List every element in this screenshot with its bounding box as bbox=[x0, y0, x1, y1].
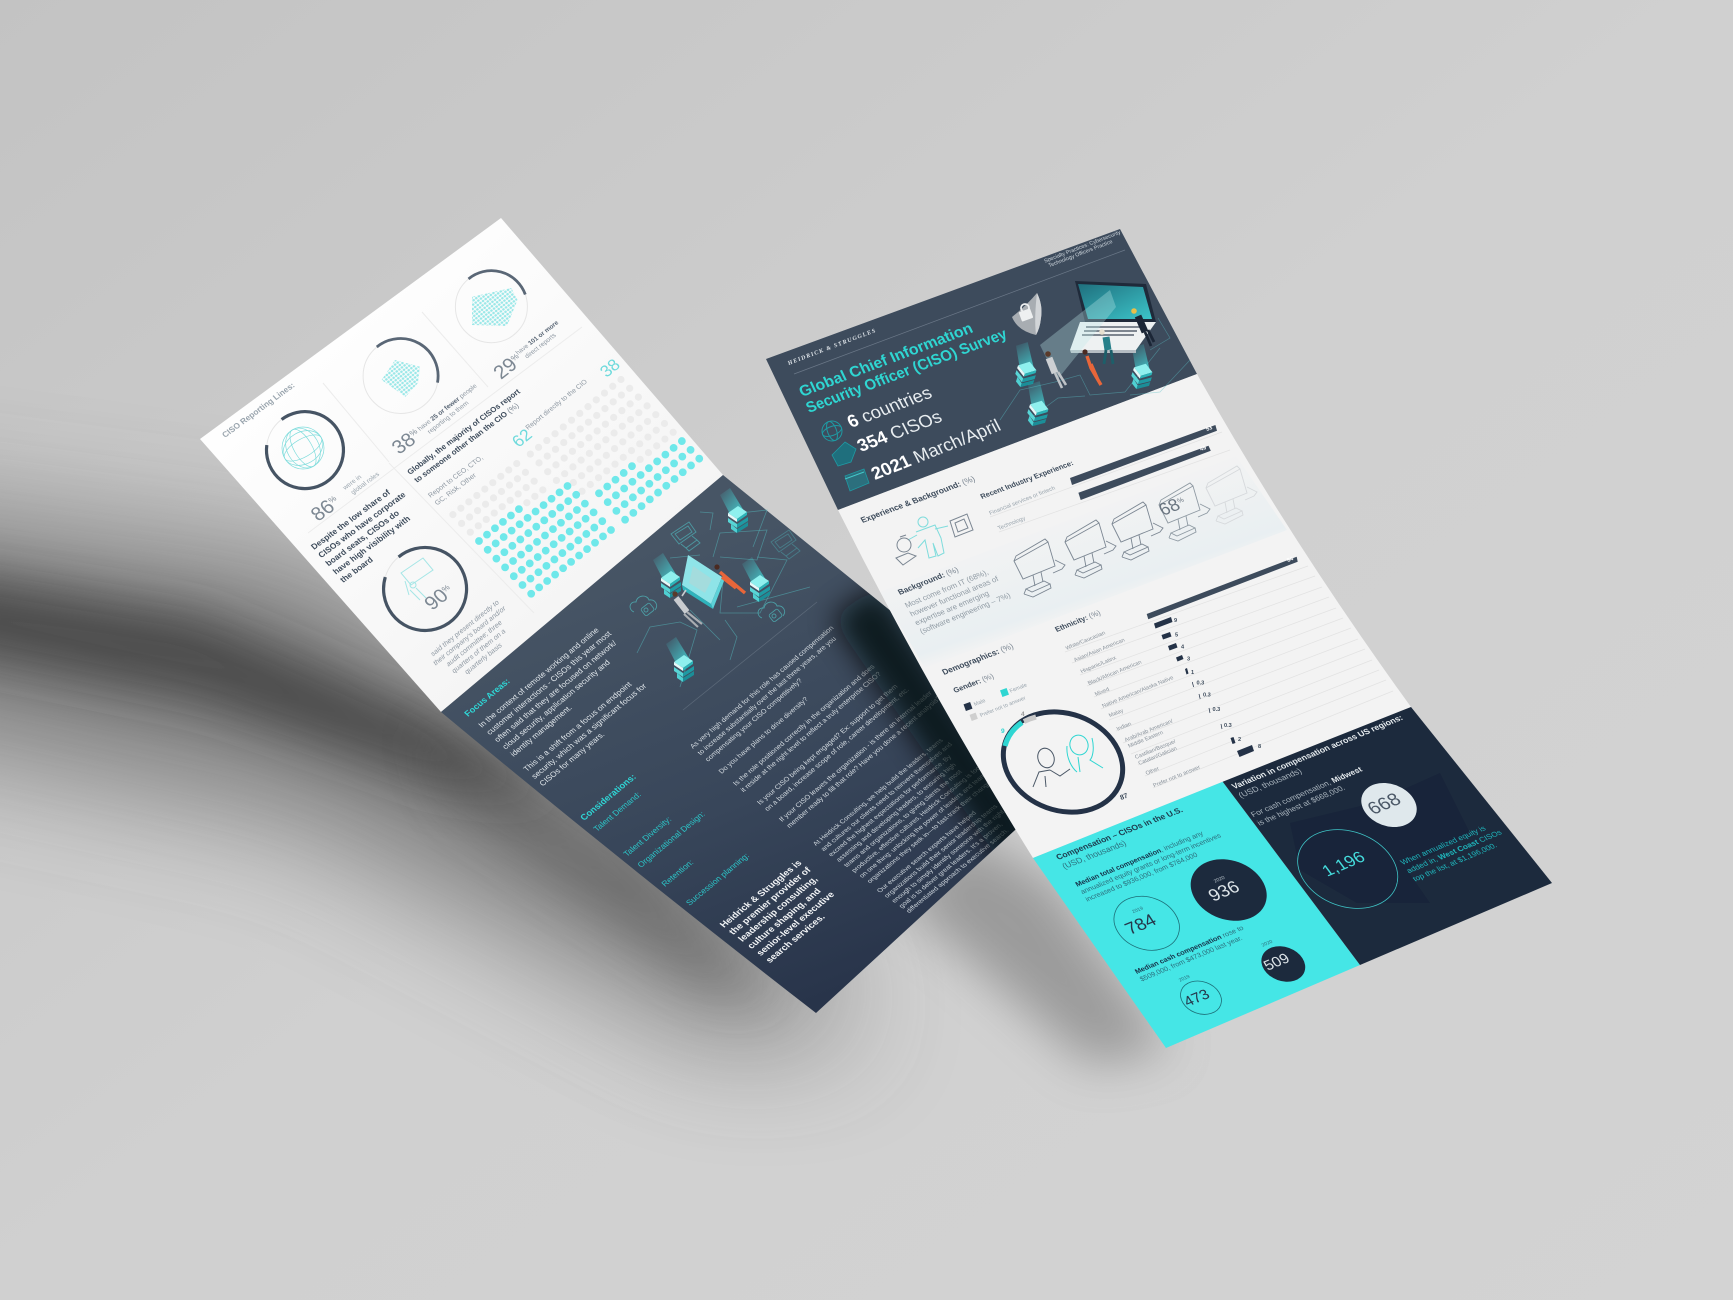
text: focus areas paragraph one: identity management. bbox=[508, 704, 574, 758]
text: 90 percent caption: quarters of them on a bbox=[451, 628, 507, 675]
chart: ethnicity bars: Malay bbox=[1108, 708, 1125, 719]
chart: ethnicity bars: 0.3 bbox=[1224, 723, 1232, 729]
heading: Demographics: Demographics: (%) bbox=[940, 642, 1015, 677]
ring: 38 percent fewer than 25: % bbox=[408, 427, 419, 438]
chart: gender donut bbox=[989, 696, 1137, 828]
ring: 38 percent fewer than 25: 38 bbox=[388, 429, 420, 459]
text: board visibility statement: CISOs who have corporate bbox=[316, 489, 408, 560]
icon: calendar bbox=[845, 469, 869, 491]
text: West Coast equity note: When annualized equity is bbox=[1398, 824, 1488, 867]
heading: Ethnicity: Ethnicity: (%) bbox=[1053, 608, 1103, 634]
text: focus areas paragraph one: cloud security, application security and bbox=[500, 658, 612, 751]
icon: woman bbox=[1067, 733, 1103, 772]
circle: 2019 total 784: 784 bbox=[1121, 910, 1160, 938]
icon row: monitors 68 percent bbox=[1014, 466, 1257, 597]
chart: ethnicity bars: 5 bbox=[1175, 632, 1178, 638]
text: focus areas paragraph two: This is a shift from a focus on endpoint bbox=[522, 680, 634, 773]
text: executive search description: enough to simply identify someone with the right bbox=[890, 809, 1006, 904]
circle: 2019 cash 473: 2019 bbox=[1178, 974, 1192, 983]
chart: ethnicity bars: Native American/Alaska Native bbox=[1101, 675, 1175, 709]
ring: 38 percent fewer than 25 bbox=[363, 338, 485, 459]
label: practice: Technology Officers Practice bbox=[1048, 239, 1114, 269]
text: executive search description: goal is to deliver great leaders. It's a proven, bbox=[898, 822, 1005, 909]
heading: Variation in compensation: (USD, thousands) bbox=[1236, 766, 1304, 800]
heading: majority report to other than CIO: to someone other than the CIO (%) bbox=[412, 401, 521, 484]
legend: gender: Male bbox=[973, 698, 987, 708]
ring: 86 percent global roles: global roles bbox=[350, 471, 382, 496]
circuit lines bbox=[637, 510, 817, 710]
icon: monitor 1 bbox=[1014, 539, 1065, 597]
illustration: left sheet security scene bbox=[630, 488, 817, 710]
chart: ethnicity bars bbox=[1065, 556, 1393, 789]
ring: 86 percent global roles: were in bbox=[342, 474, 363, 491]
icon: small cube of people bbox=[382, 360, 420, 397]
chart: gender donut: 4 bbox=[1021, 711, 1025, 718]
text: consideration questions: on a board, increase scope of role, career development, etc. bbox=[764, 687, 911, 813]
panel: left sheet bbox=[200, 218, 1060, 1013]
white section dividers bbox=[308, 312, 582, 613]
icon: cloud lock right bbox=[758, 602, 785, 622]
text: board visibility statement: have high visibility with bbox=[331, 514, 412, 576]
ring: 29 percent over 101: % bbox=[509, 352, 521, 363]
label: Report directly to CIO: Report directly to the CIO bbox=[525, 379, 589, 431]
text: 90 percent caption: their company's board and/or bbox=[433, 605, 507, 668]
header rule bbox=[794, 250, 1125, 374]
icon: man bbox=[1033, 746, 1070, 787]
text: Background explanation: Background: (%) bbox=[896, 565, 961, 597]
chart: ethnicity bars: 0.3 bbox=[1203, 692, 1211, 698]
chart: dot matrix 62 vs 38 bbox=[453, 379, 700, 594]
list: consideration labels: Talent Diversity: bbox=[622, 815, 673, 858]
chart: ethnicity bars: 0.3 bbox=[1196, 680, 1204, 686]
text: focus areas paragraph one: customer interactions - CISOs this year most bbox=[485, 629, 614, 737]
chart: ethnicity bars: Prefer not to answer bbox=[1152, 765, 1202, 789]
legend: gender: Female bbox=[1009, 683, 1028, 694]
chart: gender donut: 9 bbox=[1001, 728, 1005, 735]
icon: monitor 4 bbox=[1159, 483, 1210, 541]
text: focus areas paragraph one: In the context of remote working and online bbox=[477, 626, 601, 729]
figure: person in orange bbox=[714, 564, 745, 593]
text: board visibility statement: board seats, CISOs do bbox=[323, 508, 401, 568]
text: 90 percent caption: said they present directly to bbox=[430, 599, 500, 658]
chart: ethnicity bars: White/Caucasian bbox=[1065, 631, 1107, 652]
icon: globe bbox=[277, 422, 329, 474]
heading: CISO Reporting Lines: CISO Reporting Lines: bbox=[220, 381, 297, 439]
text: executive search description: organizations build their senior leadership teams bbox=[883, 803, 1000, 899]
panel: regional variation bbox=[1223, 707, 1552, 965]
figure: person in grey bbox=[672, 590, 702, 627]
ring: 29 percent over 101 bbox=[455, 271, 567, 384]
text: consideration questions: If your CISO leaves the organization - is there an internal leader bbox=[778, 690, 934, 823]
chart: ethnicity bars: 1 bbox=[1191, 670, 1194, 676]
chart: ethnicity bars: Other bbox=[1145, 766, 1161, 777]
circle: Midwest 668 bbox=[1355, 776, 1423, 834]
text: Heidrick and Struggles statement: Heidrick & Struggles is bbox=[718, 858, 804, 929]
title: Security Officer (CISO) Survey bbox=[803, 326, 1010, 417]
text: Heidrick Consulting description: exceed the highest expectations for performance. By bbox=[827, 754, 954, 858]
chart: ethnicity bars: 8 bbox=[1258, 744, 1261, 750]
text: Background explanation: (software engineering – 7%) bbox=[918, 591, 1012, 636]
text: Heidrick Consulting description: productive, effective cultures, Heidrick Consulting is focused bbox=[850, 756, 994, 874]
heading: majority report to other than CIO: Globally, the majority of CISOs report bbox=[405, 387, 522, 477]
list: consideration labels: Succession planning: bbox=[684, 851, 751, 907]
icon: data stack 3 bbox=[742, 557, 770, 602]
stat: 6 countries bbox=[821, 383, 935, 442]
icon: data stack 4 bbox=[666, 637, 694, 682]
heading: Variation in compensation: Variation in compensation across US regions: bbox=[1230, 713, 1405, 791]
text: consideration questions: Is your CISO being kept engaged? Ex: support to get them bbox=[756, 684, 900, 806]
circle: 2020 total 936 bbox=[1182, 849, 1275, 931]
circle: Midwest 668: 668 bbox=[1364, 790, 1405, 819]
text: Heidrick and Struggles statement: the premier provider of bbox=[727, 865, 814, 936]
text: consideration questions: it reside at the right level to reflect a truly enterprise CISO? bbox=[740, 671, 883, 794]
figure: man in teal bbox=[1099, 329, 1113, 364]
text: Heidrick and Struggles statement: search services. bbox=[763, 912, 827, 965]
chart: recent industry bars: Technology bbox=[997, 516, 1027, 532]
text: Heidrick and Struggles statement: senior-level executive bbox=[754, 890, 836, 958]
label: Report to CEO: GC, Risk, Other bbox=[434, 472, 478, 507]
text: consideration questions: to increase substantially over the last three years, are you bbox=[697, 636, 838, 757]
pale skyline band bbox=[880, 456, 1287, 668]
cyan 62 block bbox=[479, 486, 611, 594]
legend: gender bbox=[964, 683, 1028, 721]
chart: ethnicity bars: Catalan/Galician bbox=[1137, 746, 1178, 767]
text: Background explanation bbox=[896, 565, 1012, 636]
stat: 354 CISOs: 354 CISOs bbox=[854, 407, 945, 456]
panel: left sheet dark section bbox=[441, 475, 1060, 1013]
text: Heidrick Consulting description: At Heidrick Consulting, we help build the leaders, teams bbox=[812, 738, 945, 847]
text: consideration questions bbox=[689, 625, 943, 830]
icon: shield bbox=[1012, 293, 1042, 335]
icon: monitor bbox=[671, 522, 700, 551]
chart: ethnicity bars: Castilian/Basque/ bbox=[1134, 739, 1177, 761]
text: median cash compensation: $509,000, from $473,000 last year. bbox=[1138, 934, 1244, 983]
text: focus areas paragraph two: security, which was a significant focus for bbox=[530, 682, 649, 781]
chart: ethnicity bars: Hispanic/Latinx bbox=[1080, 655, 1118, 675]
chart: ethnicity bars: Arab/Arab American/ bbox=[1124, 719, 1174, 743]
panel: header bbox=[766, 229, 1197, 510]
icon: globe bbox=[821, 420, 843, 442]
text: median total compensation: increased to $936,000, from $784,000 bbox=[1084, 851, 1199, 903]
circle: 2020 cash 509: 509 bbox=[1261, 950, 1293, 974]
stat: 6 countries: 6 countries bbox=[844, 383, 935, 432]
wordmark: Heidrick and Struggles: HEIDRICK & STRUGGLES bbox=[786, 328, 878, 367]
text: focus areas paragraph one: often said that they are focused on network/ bbox=[492, 638, 619, 744]
text: consideration questions: Is the role positioned correctly in the organization and does bbox=[732, 664, 877, 787]
circle: 2019 total 784 bbox=[1106, 887, 1187, 959]
icon: people cluster bbox=[832, 442, 856, 466]
ring: 29 percent over 101: direct reports bbox=[524, 332, 558, 360]
heading: Recent Industry Experience: Recent Industry Experience: bbox=[978, 458, 1075, 501]
icon: monitor 3 bbox=[1112, 502, 1163, 560]
text: Heidrick and Struggles statement: leadership consulting, bbox=[736, 875, 820, 943]
chart: gender donut: 87 bbox=[1119, 793, 1129, 802]
ring: 29 percent over 101: 29 bbox=[489, 354, 522, 384]
legend: gender: Prefer not to answer bbox=[979, 696, 1027, 719]
text: executive search description: Our executive search experts have helped bbox=[876, 810, 978, 894]
icon: person with money and chip bbox=[896, 514, 973, 565]
cast shadows on backdrop bbox=[0, 500, 1170, 1065]
text: consideration questions: member ready to fill that role? Have you done a recent analysis? bbox=[786, 695, 943, 830]
chart: recent industry bars: Financial services or fintech bbox=[988, 486, 1057, 517]
icon: data stack 2 bbox=[1016, 378, 1057, 430]
text: focus areas paragraph two: CISOs for many years. bbox=[538, 730, 607, 788]
icon row: monitors 68 percent: % bbox=[1176, 497, 1185, 505]
icon: data stack 3 bbox=[1120, 341, 1161, 393]
text: Background explanation: expertise are emerging bbox=[913, 589, 991, 627]
icon: cloud lock bbox=[630, 596, 657, 616]
label: practice: Specialty Practices: Cybersecurity bbox=[1043, 230, 1122, 265]
chart: ethnicity bars: 84 bbox=[1286, 556, 1296, 564]
ring: 38 percent fewer than 25: have 25 or fewer people bbox=[417, 383, 479, 432]
circle: 2019 total 784: 2019 bbox=[1131, 906, 1145, 915]
panel: left sheet white section bbox=[200, 218, 723, 712]
grey background dots bbox=[453, 379, 673, 532]
illustration: header laptop scene bbox=[1000, 281, 1190, 430]
text: Heidrick Consulting description: and cultures our clients need to reinvent themselves and bbox=[820, 742, 955, 852]
text: executive search description: differentiated approach to executive search. bbox=[905, 828, 1011, 914]
map: United States silhouette bbox=[1290, 773, 1470, 903]
heading: Considerations: Considerations: bbox=[578, 772, 638, 822]
icon: monitor 2 bbox=[1065, 520, 1116, 578]
heading: Experience and Background: Experience & Background: (%) bbox=[859, 474, 977, 525]
icon: monitor faded bbox=[771, 530, 800, 559]
hologram bbox=[1040, 290, 1116, 380]
text: Background explanation: Most come from IT (68%), bbox=[903, 568, 990, 610]
text: Background explanation: however functional areas of bbox=[908, 574, 1001, 618]
number: 62: 62 bbox=[508, 425, 536, 451]
list: consideration labels bbox=[592, 790, 751, 907]
circle: 2020 total 936: 936 bbox=[1204, 877, 1243, 905]
heading: Compensation: (USD, thousands) bbox=[1060, 838, 1128, 871]
shadow from right sheet on left sheet bbox=[832, 585, 1045, 862]
list: consideration labels: Retention: bbox=[660, 858, 696, 888]
chart: ethnicity bars: Black/African American bbox=[1087, 660, 1143, 687]
figure: man in dark suit bbox=[1131, 308, 1154, 346]
circle: West Coast 1,196 bbox=[1286, 816, 1409, 922]
list: consideration labels: Talent Demand: bbox=[592, 790, 643, 833]
chart: ethnicity bars: 4 bbox=[1181, 644, 1185, 650]
icon: large cube of people bbox=[472, 288, 518, 326]
icon: laptop bbox=[1070, 281, 1156, 353]
icon: presenter at board bbox=[401, 558, 433, 600]
figure: man in grey bbox=[1045, 351, 1066, 388]
chart: ethnicity bars: 3 bbox=[1187, 656, 1190, 662]
icon row: monitors 68 percent: 68 bbox=[1155, 495, 1184, 519]
panel: white body bbox=[838, 374, 1411, 858]
ring: 29 percent over 101: have 101 or more bbox=[515, 320, 560, 356]
circle: 2020 cash 509: 2020 bbox=[1260, 939, 1274, 948]
text: Heidrick Consulting description: assessing and developing leaders, to ensuring high bbox=[835, 762, 958, 863]
circle: 2019 cash 473 bbox=[1176, 974, 1226, 1020]
text: 90 percent caption: quarterly basis bbox=[464, 642, 504, 676]
chart: recent industry bars: 53 bbox=[1205, 425, 1214, 433]
text: consideration questions: compensating your CISO competitively? bbox=[704, 678, 804, 763]
icon: monitor 5 faded bbox=[1206, 466, 1257, 524]
heading: Compensation: Compensation – CISOs in the U.S. bbox=[1054, 806, 1185, 862]
circle: 2020 total 936: 2020 bbox=[1213, 875, 1227, 884]
text: Midwest cash: is the highest at $668,000. bbox=[1255, 784, 1347, 827]
ring: 86 percent global roles: 86 bbox=[307, 496, 339, 526]
text: median total compensation: Median total compensation, including any bbox=[1074, 830, 1205, 888]
stat: 354 CISOs bbox=[832, 407, 945, 466]
text: median cash compensation: Median cash compensation rose to bbox=[1133, 924, 1245, 976]
title: Global Chief Information bbox=[796, 320, 976, 401]
circle: 2020 cash 509 bbox=[1256, 939, 1310, 988]
icon: data stack 1 bbox=[1004, 339, 1045, 391]
chart: ethnicity bars: Asian/Asian American bbox=[1073, 638, 1126, 663]
text: Heidrick Consulting description: organizations they seek in—to fast-track their change. bbox=[866, 779, 995, 885]
ring: 90 percent present to board: % bbox=[440, 583, 452, 594]
ring: 90 percent present to board bbox=[384, 547, 467, 630]
text: board visibility statement: Despite the low share of bbox=[309, 487, 392, 551]
circuit lines bbox=[1000, 318, 1190, 420]
cyan 38 block bbox=[599, 441, 700, 520]
ring: 86 percent global roles: % bbox=[327, 494, 338, 505]
ring: 90 percent present to board: 90 bbox=[420, 585, 453, 615]
circle: 2019 cash 473: 473 bbox=[1181, 986, 1213, 1010]
ring: 38 percent fewer than 25: reporting to them bbox=[426, 400, 471, 435]
chart: recent industry bars bbox=[988, 425, 1230, 532]
text: Heidrick Consulting description: teams and organizations, to giving clients the most bbox=[843, 769, 964, 869]
text: median total compensation: annualized equity grants or long-term incentives bbox=[1079, 832, 1223, 896]
text: West Coast equity note: added in, West Coast CISOs bbox=[1405, 828, 1504, 875]
chart: ethnicity bars: 2 bbox=[1238, 737, 1241, 743]
text: Heidrick and Struggles statement: culture shaping, and bbox=[745, 886, 823, 950]
chart: ethnicity bars: 0.3 bbox=[1212, 707, 1220, 713]
icon: central cube bbox=[682, 555, 724, 609]
label: Report to CEO: Report to CEO, CTO, bbox=[427, 455, 485, 500]
circle: West Coast 1,196: 1,196 bbox=[1318, 848, 1369, 880]
text: Midwest cash: For cash compensation, Midwest bbox=[1249, 765, 1364, 819]
text: 90 percent caption: audit committee; three bbox=[446, 619, 503, 669]
chart: ethnicity bars: Mixed bbox=[1094, 687, 1111, 698]
stat: 2021 March/April: 2021 March/April bbox=[868, 416, 1004, 484]
heading: Focus Areas: Focus Areas: bbox=[462, 676, 512, 718]
number: 38: 38 bbox=[596, 355, 624, 381]
text: consideration questions: As very high demand for this role has caused compensation bbox=[689, 625, 836, 750]
panel: compensation bbox=[1033, 782, 1360, 1048]
figure: woman in orange bbox=[1082, 349, 1101, 385]
chart: ethnicity bars: Indian bbox=[1116, 721, 1133, 732]
ring: 86 percent global roles bbox=[266, 412, 382, 526]
text: West Coast equity note: top the list, at $1,196,000. bbox=[1411, 841, 1499, 883]
heading: Gender: Gender: (%) bbox=[951, 671, 996, 695]
chart: ethnicity bars: 9 bbox=[1174, 618, 1177, 624]
chart: recent industry bars: 49 bbox=[1199, 445, 1208, 453]
chart: ethnicity bars: Middle Eastern bbox=[1127, 730, 1165, 749]
icon: data stack 1 bbox=[720, 488, 748, 533]
text: consideration questions: Do you have plans to drive diversity? bbox=[718, 696, 810, 775]
icon: data stack 2 bbox=[653, 553, 681, 598]
text: board visibility statement: the board bbox=[338, 555, 375, 584]
text: Heidrick Consulting description: on one thing: unlocking the power of leaders and teams bbox=[858, 770, 991, 879]
list: consideration labels: Organizational Design: bbox=[636, 810, 707, 869]
panel: right sheet bbox=[766, 229, 1552, 1048]
